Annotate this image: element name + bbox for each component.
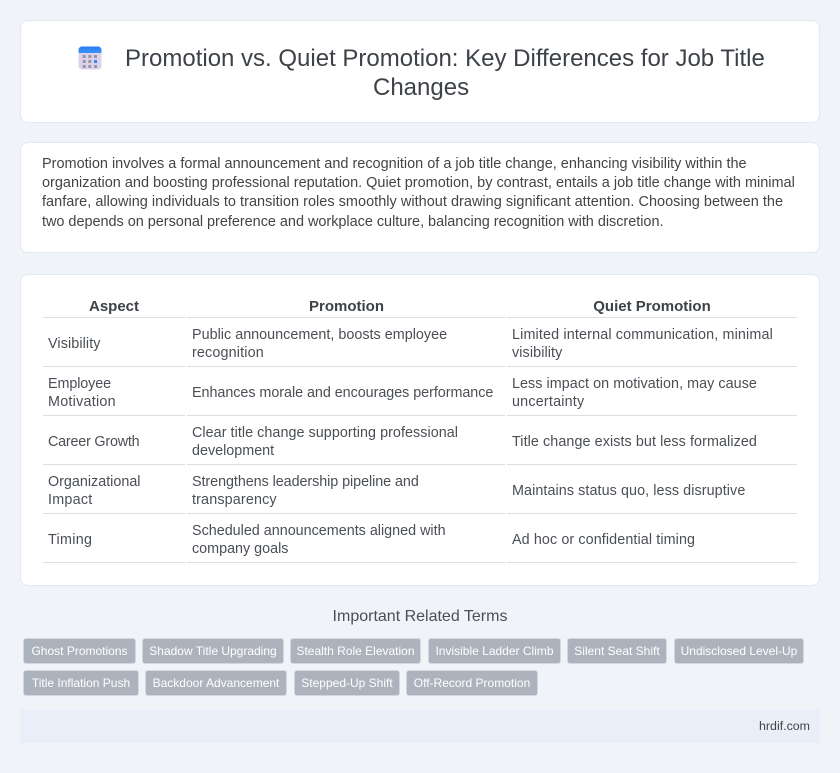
- row: Visibility: visibility: [512, 345, 562, 361]
- title: Promotion vs. Quiet Promotion: Key Differences for Job Title: [125, 45, 765, 72]
- summary text: two depends on personal preference and workplace culture, balancing recognition with discretion.: [42, 214, 663, 230]
- row: Timing: Timing: [48, 532, 92, 548]
- row: Visibility: Limited internal communication, minimal: [512, 327, 773, 343]
- summary text: [42, 156, 795, 230]
- row: Timing: Scheduled announcements aligned with: [192, 523, 446, 539]
- row: Organizational Impact: transparency: [192, 492, 277, 508]
- panel: title card: [20, 20, 820, 123]
- footer bar: [20, 710, 820, 743]
- row: Organizational Impact: Organizational: [48, 474, 140, 490]
- related term tags: Invisible Ladder Climb: [435, 644, 554, 658]
- row: Career Growth: Career Growth: [48, 434, 139, 450]
- row: Career Growth: development: [192, 443, 274, 459]
- footer source: hrdif.com: [759, 719, 810, 733]
- row: Employee Motivation: uncertainty: [512, 394, 584, 410]
- related term tags: Stepped-Up Shift: [301, 676, 393, 690]
- panel: comparison table: [20, 274, 820, 586]
- icon: calendar: [78, 46, 102, 70]
- row: Visibility: Visibility: [48, 336, 101, 352]
- row: Timing: Ad hoc or confidential timing: [512, 532, 695, 548]
- related term tags: Shadow Title Upgrading: [149, 644, 277, 658]
- related term tags: Undisclosed Level-Up: [681, 644, 797, 658]
- related term tags: Stealth Role Elevation: [296, 644, 415, 658]
- table header: Aspect: [89, 298, 139, 315]
- table header: Promotion: [309, 298, 384, 315]
- summary text: fanfare, allowing individuals to transition roles smoothly without drawing significant attention. Choosing between the: [42, 194, 783, 210]
- related term tags: Silent Seat Shift: [574, 644, 660, 658]
- related term tags: Backdoor Advancement: [153, 676, 279, 690]
- row: Timing: company goals: [192, 541, 288, 557]
- row: Employee Motivation: Enhances morale and encourages performance: [192, 385, 493, 401]
- row: Career Growth: Title change exists but less formalized: [512, 434, 757, 450]
- related term tags: [23, 638, 804, 696]
- row: Organizational Impact: Maintains status quo, less disruptive: [512, 483, 745, 499]
- related term tags: Ghost Promotions: [31, 644, 128, 658]
- row: Visibility: Public announcement, boosts employee: [192, 327, 447, 343]
- row: Career Growth: [48, 425, 757, 459]
- row: Organizational Impact: Impact: [48, 492, 93, 508]
- panel: summary card: [20, 142, 820, 253]
- title: Changes: [373, 74, 469, 101]
- row: Employee Motivation: Employee: [48, 376, 111, 392]
- title: [125, 45, 765, 101]
- row: Employee Motivation: [48, 376, 757, 410]
- row: Career Growth: Clear title change supporting professional: [192, 425, 458, 441]
- row: Timing: [48, 523, 695, 557]
- row: Organizational Impact: [48, 474, 745, 508]
- row: Visibility: [48, 327, 773, 361]
- summary text: organization and boosting professional reputation. Quiet promotion, by contrast, entails a job title change with minimal: [42, 175, 795, 191]
- row: Employee Motivation: Motivation: [48, 394, 116, 410]
- row: Employee Motivation: Less impact on motivation, may cause: [512, 376, 757, 392]
- related term tags: Off-Record Promotion: [414, 676, 530, 690]
- row: Visibility: recognition: [192, 345, 264, 361]
- related terms heading: Important Related Terms: [333, 608, 507, 625]
- row: Organizational Impact: Strengthens leadership pipeline and: [192, 474, 419, 490]
- related term tags: Title Inflation Push: [32, 676, 130, 690]
- table header: [89, 298, 711, 315]
- table header: Quiet Promotion: [593, 298, 711, 315]
- summary text: Promotion involves a formal announcement and recognition of a job title change, enhancing visibility within the: [42, 156, 747, 172]
